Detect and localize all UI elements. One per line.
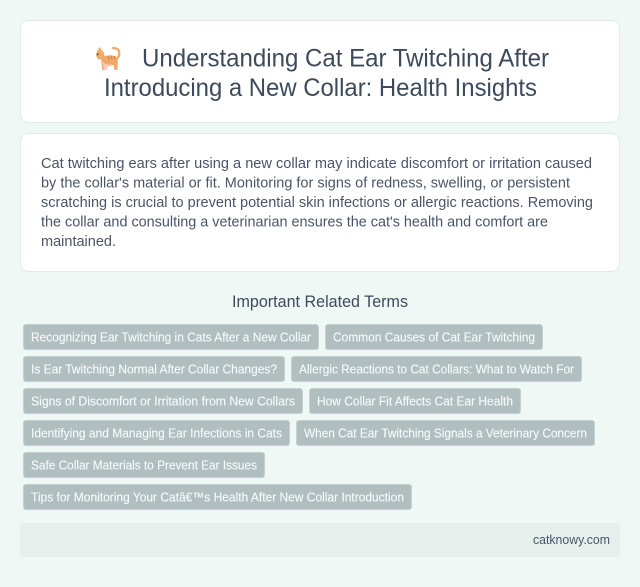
tag: How Collar Fit Affects Cat Ear Health — [317, 394, 513, 408]
heading: important related terms: Important Related Terms — [232, 293, 408, 311]
tag: Identifying and Managing Ear Infections in Cats — [31, 426, 282, 440]
tag: Safe Collar Materials to Prevent Ear Issues — [31, 458, 257, 472]
tag — [296, 420, 594, 446]
tag: Is Ear Twitching Normal After Collar Changes? — [31, 362, 277, 376]
tag: Allergic Reactions to Cat Collars: What to Watch For — [299, 362, 574, 376]
title: Introducing a New Collar: Health Insights — [104, 74, 537, 102]
tag — [292, 356, 582, 382]
tag: Tips for Monitoring Your Catâ€™s Health After New Collar Introduction — [31, 490, 404, 504]
tag — [310, 388, 520, 414]
summary text: maintained. — [41, 234, 116, 250]
icon: cat — [96, 47, 119, 70]
tag — [24, 420, 290, 446]
footer: catknowy.com — [533, 532, 610, 547]
summary text: scratching is crucial to prevent potential skin infections or allergic reactions. Removing — [41, 195, 593, 211]
summary text: Cat twitching ears after using a new collar may indicate discomfort or irritation caused — [41, 156, 592, 172]
tag: When Cat Ear Twitching Signals a Veterinary Concern — [304, 426, 587, 440]
tag — [24, 452, 264, 478]
tag: Signs of Discomfort or Irritation from New Collars — [31, 394, 295, 408]
tag list — [24, 324, 594, 510]
tag — [24, 356, 284, 382]
tag: Common Causes of Cat Ear Twitching — [333, 330, 535, 344]
title: Understanding Cat Ear Twitching After — [142, 44, 549, 72]
tag — [24, 484, 412, 510]
panel: summary card — [20, 134, 620, 272]
summary text — [41, 156, 593, 250]
summary text: the collar and consulting a veterinarian ensures the cat's health and comfort are — [41, 214, 548, 230]
tag — [24, 388, 302, 414]
tag — [24, 324, 318, 350]
footer — [20, 523, 620, 557]
title — [104, 44, 549, 102]
panel: title card — [20, 20, 620, 122]
summary text: by the collar's material or fit. Monitoring for signs of redness, swelling, or persistent — [41, 176, 570, 192]
tag: Recognizing Ear Twitching in Cats After a New Collar — [31, 330, 311, 344]
tag — [326, 324, 542, 350]
